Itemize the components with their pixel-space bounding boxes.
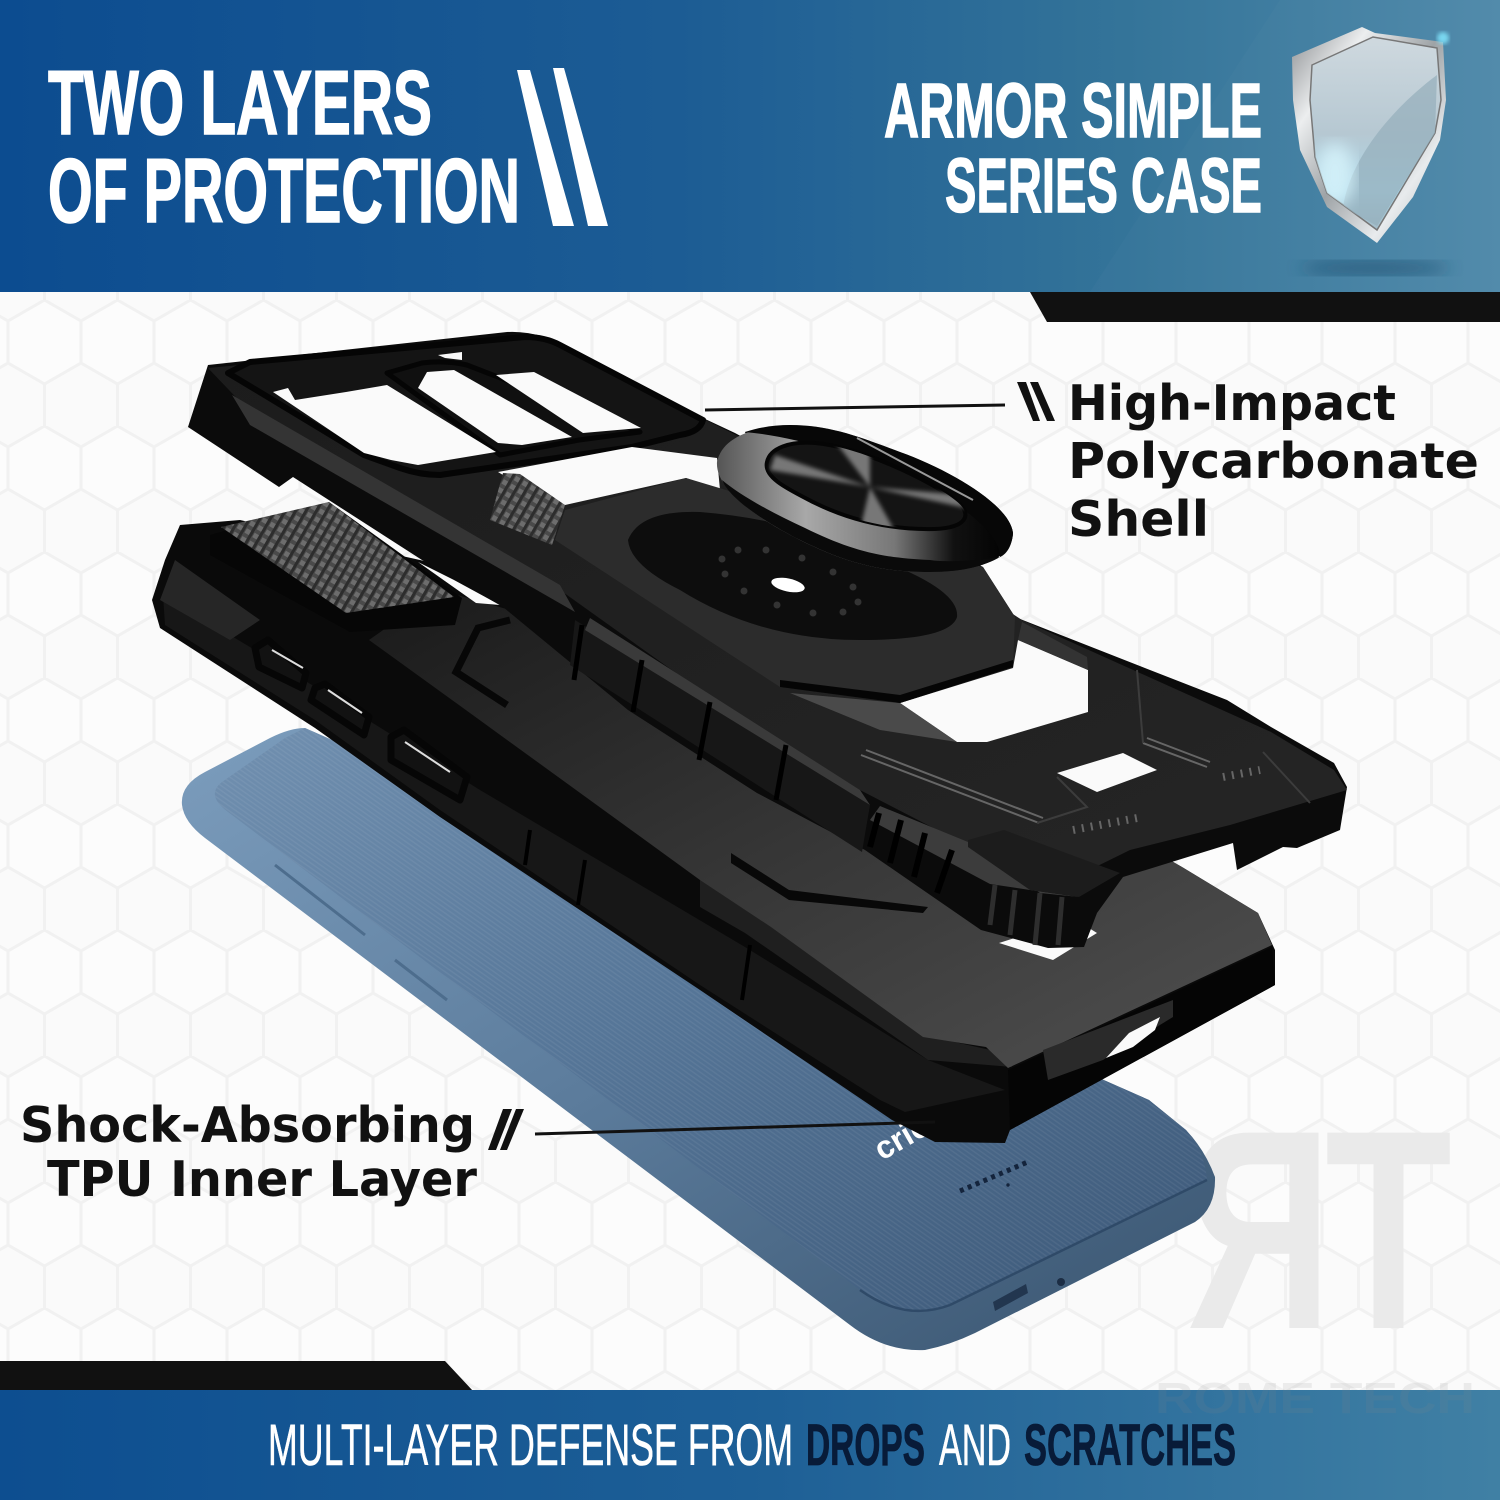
footer banner	[0, 1390, 1500, 1500]
header banner	[0, 0, 1500, 292]
ring holder	[717, 425, 1013, 572]
watermark: mirrored RT logo: T	[1325, 1072, 1452, 1389]
power button	[391, 730, 467, 800]
footer tagline: SCRATCHES	[1024, 1413, 1236, 1478]
mount plate	[555, 478, 1015, 703]
camera island	[387, 362, 640, 455]
knurled grip: upper	[490, 473, 565, 545]
blue phone	[182, 728, 1215, 1350]
speaker dots	[960, 1161, 1030, 1191]
center hole	[770, 575, 806, 595]
corner ribs	[870, 806, 1120, 945]
label text: Polycarbonate	[1068, 433, 1479, 490]
leader line	[535, 1122, 935, 1134]
port and hole	[993, 1284, 1028, 1311]
title: two layers of protection: OF PROTECTION	[48, 141, 520, 242]
watermark: rome tech: ROME TECH	[1155, 1374, 1475, 1423]
icon: double slash	[517, 68, 608, 226]
title: two layers of protection	[48, 53, 520, 242]
title: two layers of protection: TWO LAYERS	[48, 53, 432, 154]
shell right rim details	[861, 738, 1210, 823]
lower edge with camera	[1008, 947, 1275, 1130]
accent bar: top right	[1030, 292, 1500, 322]
knurled grip: lower	[210, 502, 462, 632]
slashes	[488, 1109, 524, 1150]
label text: TPU Inner Layer	[47, 1151, 478, 1208]
heading: armor simple series case: ARMOR SIMPLE	[884, 68, 1262, 154]
camera rim	[228, 337, 703, 475]
slashes	[1017, 382, 1055, 421]
shell bevel	[232, 395, 575, 612]
product: exploded phone case	[152, 332, 1347, 1350]
gap behind shell	[418, 562, 500, 605]
brand text: cric	[868, 1107, 935, 1167]
label text	[1068, 375, 1479, 548]
watermark: mirrored RT logo: R	[1186, 1072, 1332, 1389]
gray notch shadow	[731, 853, 928, 913]
side panel	[163, 595, 1005, 1112]
bracket detail	[456, 620, 510, 705]
gray back face	[369, 590, 1272, 1068]
callout: shock-absorbing TPU inner layer	[20, 1097, 935, 1208]
label text: Shock-Absorbing	[20, 1097, 475, 1154]
heading: armor simple series case	[884, 68, 1262, 229]
accent bar: bottom left	[0, 1361, 473, 1391]
dots	[718, 546, 862, 616]
shell top face	[208, 337, 1347, 882]
label text: Shell	[1068, 491, 1209, 548]
shell silhouette	[188, 332, 1347, 948]
TPU inner layer	[152, 502, 1275, 1143]
center opening	[498, 447, 720, 505]
right opening	[900, 640, 1088, 742]
volume button: plus	[255, 640, 306, 688]
cone disc	[767, 443, 965, 529]
volume button: minus	[311, 684, 369, 735]
watermark: mirrored RT logo	[1186, 1072, 1452, 1389]
polycarbonate shell	[188, 332, 1347, 948]
background: honeycomb	[0, 290, 1500, 1390]
footer tagline: MULTI-LAYER DEFENSE FROM	[268, 1413, 793, 1478]
label text: High-Impact	[1068, 375, 1396, 432]
footer tagline: AND	[939, 1413, 1011, 1478]
heading: armor simple series case: SERIES CASE	[945, 143, 1262, 229]
footer tagline: DROPS	[806, 1413, 925, 1478]
callout: high-impact polycarbonate shell	[705, 375, 1479, 548]
camera windows	[273, 352, 1157, 792]
bottom opening	[999, 925, 1097, 960]
label text	[20, 1097, 478, 1208]
small rectangular hole	[1057, 753, 1157, 792]
recess	[628, 512, 957, 640]
leader line	[705, 405, 1005, 410]
icon: glass shield	[1292, 27, 1450, 275]
